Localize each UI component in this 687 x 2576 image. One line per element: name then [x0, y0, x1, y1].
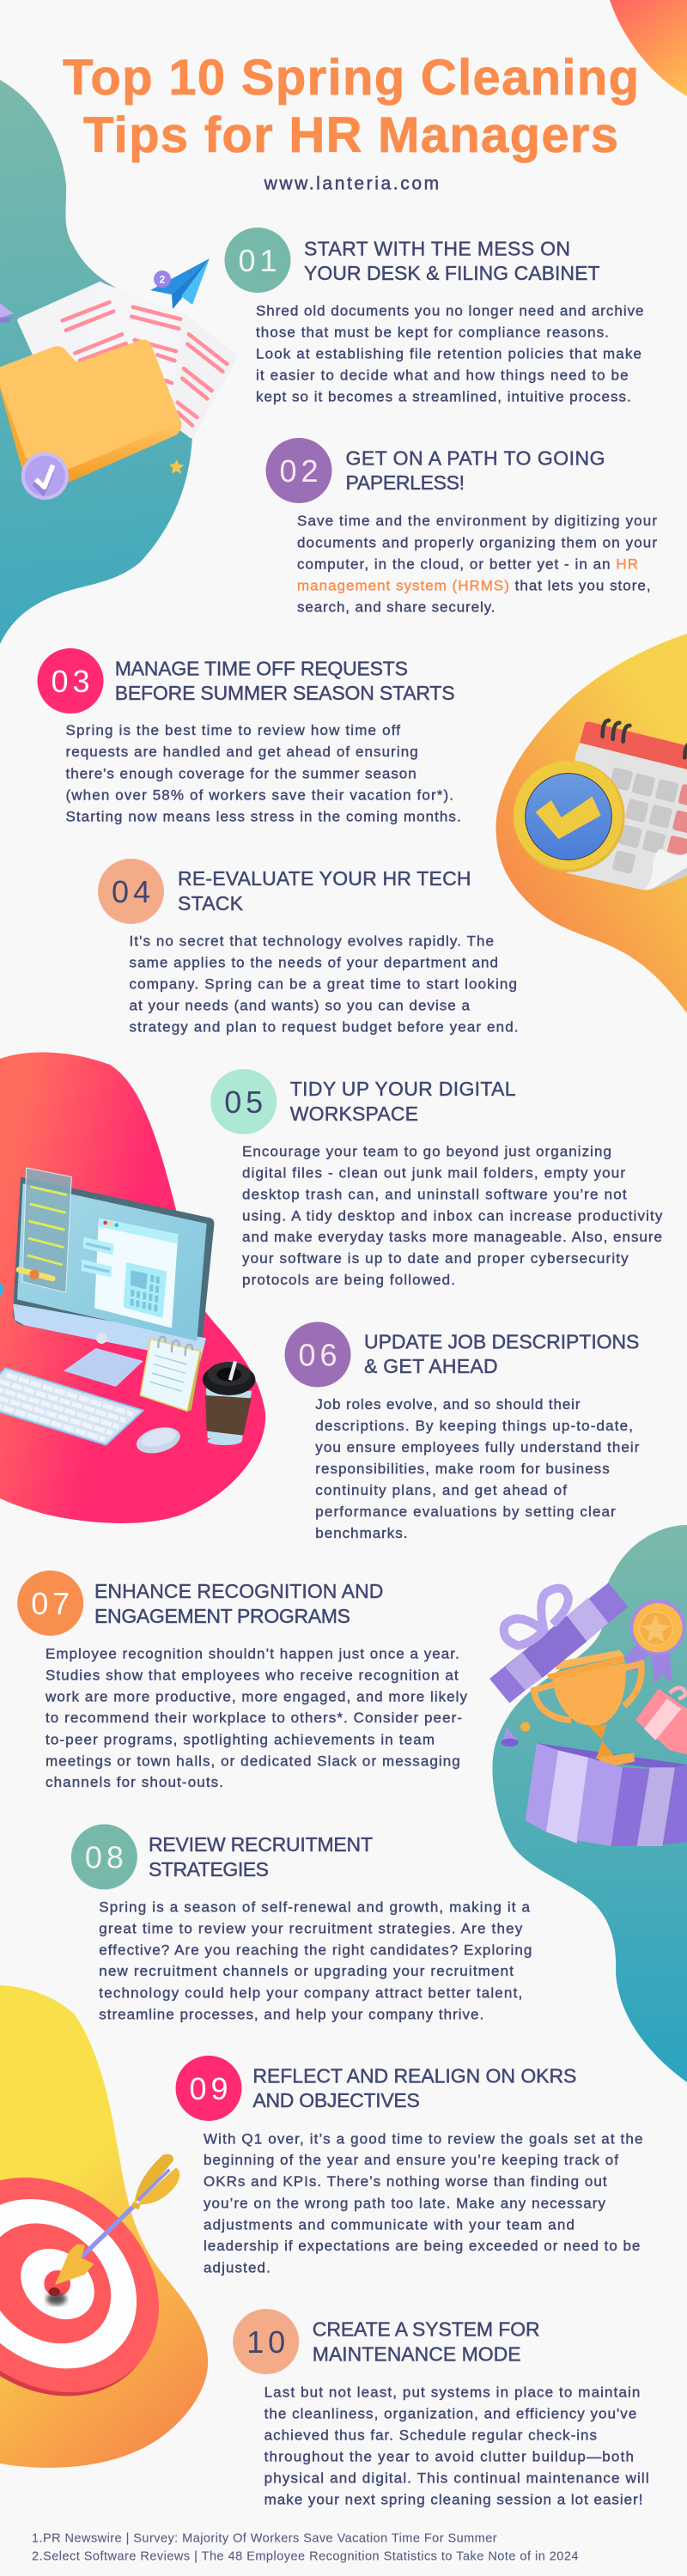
body 07: work are more productive, more engaged, and more likely: [45, 1688, 467, 1704]
body 06: descriptions. By keeping things up-to-date,: [315, 1418, 633, 1434]
section 01: [225, 228, 644, 404]
badge 02: 02: [280, 453, 318, 489]
body 06: responsibilities, make room for business: [315, 1461, 610, 1477]
heading 02: GET ON A PATH TO GOING: [345, 447, 605, 469]
heading 06: [364, 1330, 639, 1377]
section 08: [71, 1824, 532, 2022]
heading 08: [149, 1833, 373, 1880]
badge 02: [266, 438, 331, 503]
badge 03: 03: [52, 664, 89, 699]
footnotes: 1.PR Newswire | Survey: Majority Of Workers Save Vacation Time For Summer: [32, 2531, 497, 2545]
blob: pink left: [0, 1052, 265, 1523]
body 05: your software is up to date and proper cybersecurity: [242, 1250, 629, 1267]
body 06: continuity plans, and get ahead of: [315, 1482, 567, 1498]
blob: yellow left: [0, 1985, 208, 2468]
body 10: [264, 2384, 649, 2507]
badge 04: [98, 859, 164, 924]
body 06: performance evaluations by setting clear: [315, 1504, 616, 1520]
body 05: and make everyday tasks more manageable. Also, ensure: [242, 1229, 662, 1245]
illustration: paper plane: 2: [160, 273, 166, 285]
body 07: Studies show that employees who receive recognition at: [46, 1667, 459, 1683]
heading 05: [290, 1078, 516, 1125]
body 05: [242, 1144, 663, 1288]
body 04: company. Spring can be a great time to start looking: [129, 975, 517, 992]
body 01: [256, 302, 644, 404]
heading 03: MANAGE TIME OFF REQUESTS: [115, 657, 408, 679]
body 10: throughout the year to avoid clutter buildup—both: [264, 2448, 634, 2464]
body 09: With Q1 over, it’s a good time to review the goals set at the: [204, 2130, 642, 2147]
heading 09: REFLECT AND REALIGN ON OKRS: [252, 2064, 576, 2087]
body 05: desktop trash can, and uninstall software you're not: [242, 1186, 627, 1202]
heading 03: [115, 657, 455, 704]
body 04: at your needs (and wants) so you can devise a: [129, 997, 471, 1013]
body 03: Starting now means less stress in the coming months.: [65, 808, 461, 824]
body 07: to recommend their workplace to others*. Consider peer-: [46, 1710, 462, 1726]
body 09: adjustments and communicate with your team and: [204, 2216, 575, 2233]
badge 01: [225, 228, 290, 293]
body 08: great time to review your recruitment strategies. Are they: [99, 1920, 523, 1937]
heading 01: START WITH THE MESS ON: [304, 237, 570, 259]
badge 07: 07: [31, 1586, 70, 1621]
body 02: [297, 513, 657, 616]
badge 06: 06: [299, 1338, 337, 1372]
body 03: Spring is the best time to review how time off: [65, 722, 400, 738]
body 07: Employee recognition shouldn’t happen just once a year.: [46, 1645, 459, 1662]
body 03: (when over 58% of workers save their vacation for*).: [65, 787, 453, 803]
heading 08: STRATEGIES: [149, 1858, 269, 1880]
badge 01: 01: [239, 243, 277, 278]
body 06: you ensure employees fully understand their: [315, 1439, 640, 1455]
body 03: [65, 722, 461, 824]
illustration: paper plane: [150, 258, 210, 309]
body 06: [315, 1396, 640, 1541]
heading 01: YOUR DESK & FILING CABINET: [304, 262, 599, 284]
badge 09: [175, 2056, 242, 2121]
body 02: computer, in the cloud, or better yet - in an HR: [297, 556, 638, 572]
heading 10: [313, 2318, 540, 2365]
body 05: protocols are being followed.: [242, 1272, 455, 1288]
body 10: make your next spring cleaning session a lot easier!: [264, 2491, 642, 2507]
illustration: desktop computer, keyboard, coffee: [0, 1168, 255, 1458]
section 05: [210, 1069, 663, 1288]
heading 02: PAPERLESS!: [345, 471, 465, 494]
body 01: those that must be kept for compliance reasons.: [256, 324, 609, 340]
badge 08: [71, 1824, 137, 1889]
title: Top 10 Spring Cleaning: [63, 50, 639, 106]
body 04: same applies to the needs of your department and: [129, 954, 498, 970]
blob: teal right: [492, 1525, 687, 2082]
blob: orange right: [495, 634, 687, 1013]
body 01: kept so it becomes a streamlined, intuitive process.: [256, 388, 631, 404]
body 08: [99, 1899, 532, 2022]
badge 05: 05: [224, 1084, 263, 1120]
heading 03: BEFORE SUMMER SEASON STARTS: [115, 682, 455, 704]
badge 09: 09: [189, 2071, 228, 2106]
illustration: folder with papers: [0, 285, 235, 500]
title: [63, 50, 639, 163]
body 10: achieved thus far. Schedule regular check-ins: [264, 2427, 597, 2443]
body 08: Spring is a season of self-renewal and growth, making it a: [99, 1899, 531, 1915]
section 04: [98, 859, 519, 1036]
heading 04: [178, 867, 471, 914]
body 07: meetings or town halls, or dedicated Slack or messaging: [46, 1753, 460, 1769]
heading 10: CREATE A SYSTEM FOR: [313, 2318, 540, 2341]
body 05: using. A tidy desktop and inbox can increase productivity: [242, 1207, 663, 1224]
body 08: streamline processes, and help your company thrive.: [99, 2006, 483, 2022]
badge 04: 04: [112, 874, 150, 909]
body 10: physical and digital. This continual maintenance will: [264, 2470, 649, 2486]
body 03: requests are handled and get ahead of ensuring: [65, 744, 418, 760]
body 03: there's enough coverage for the summer season: [65, 765, 416, 781]
body 07: channels for shout-outs.: [46, 1774, 223, 1790]
heading 04: STACK: [178, 892, 244, 914]
body 07: to-peer programs, spotlighting achievements in team: [46, 1731, 435, 1747]
section 07: [17, 1571, 467, 1790]
heading 07: ENGAGEMENT PROGRAMS: [94, 1605, 350, 1627]
section 02: [266, 438, 657, 616]
body 08: new recruitment channels or upgrading your recruitment: [99, 1963, 514, 1979]
badge 05: [210, 1069, 277, 1134]
heading 01: [304, 237, 599, 284]
body 06: Job roles evolve, and so should their: [315, 1396, 581, 1413]
body 09: beginning of the year and ensure you’re keeping track of: [204, 2152, 618, 2168]
body 01: it easier to decide what and how things need to be: [256, 367, 629, 383]
body 02: search, and share securely.: [297, 599, 495, 616]
body 10: Last but not least, put systems in place to maintain: [264, 2384, 640, 2400]
body 08: effective? Are you reaching the right candidates? Exploring: [99, 1941, 532, 1958]
section 03: [38, 648, 461, 824]
heading 07: ENHANCE RECOGNITION AND: [94, 1580, 383, 1602]
heading 06: & GET AHEAD: [364, 1355, 498, 1377]
section 10: [233, 2309, 649, 2507]
body 01: Look at establishing file retention policies that make: [256, 345, 641, 361]
body 07: [45, 1645, 467, 1790]
heading 06: UPDATE JOB DESCRIPTIONS: [364, 1330, 639, 1352]
body 02: Save time and the environment by digitizing your: [297, 513, 657, 529]
footnotes: 2.Select Software Reviews | The 48 Employee Recognition Statistics to Take Note of in 2024: [32, 2549, 578, 2563]
body 06: benchmarks.: [315, 1525, 407, 1541]
body 04: strategy and plan to request budget before year end.: [129, 1018, 519, 1036]
body 05: digital files - clean out junk mail folders, empty your: [242, 1164, 625, 1182]
footnotes: [32, 2531, 578, 2563]
body 09: adjusted.: [204, 2259, 271, 2275]
body 04: [129, 933, 519, 1036]
body 10: the cleanliness, organization, and efficiency you've: [264, 2405, 636, 2421]
website url: www.lanteria.com: [264, 173, 439, 194]
badge 08: 08: [85, 1839, 124, 1875]
body 09: [204, 2130, 642, 2275]
body 09: leadership if expectations are being exceeded or need to be: [204, 2238, 640, 2254]
body 02: management system (HRMS) that lets you store,: [297, 577, 651, 594]
badge 10: [233, 2309, 299, 2374]
body 08: technology could help your company attract better talent,: [99, 1984, 522, 2001]
title: Tips for HR Managers: [83, 107, 618, 163]
body 09: OKRs and KPIs. There’s nothing worse than finding out: [204, 2173, 607, 2190]
illustration: calendar with check badge: [514, 720, 687, 890]
body 01: Shred old documents you no longer need and archive: [256, 302, 644, 319]
blob: coral top right: [610, 0, 687, 96]
body 09: you’re on the wrong path too late. Make any necessary: [204, 2195, 606, 2211]
heading 05: TIDY UP YOUR DIGITAL: [290, 1078, 516, 1100]
section 06: [285, 1322, 640, 1541]
badge 07: [17, 1571, 83, 1636]
badge 10: 10: [246, 2324, 285, 2360]
badge 06: [285, 1322, 350, 1388]
heading 05: WORKSPACE: [290, 1103, 418, 1125]
heading 08: REVIEW RECRUITMENT: [149, 1833, 373, 1856]
illustration: target with arrow: [0, 2133, 202, 2440]
badge 03: [38, 648, 103, 714]
body 04: It's no secret that technology evolves rapidly. The: [129, 933, 494, 950]
blob: teal top left: [0, 80, 192, 644]
heading 04: RE-EVALUATE YOUR HR TECH: [178, 867, 471, 890]
heading 07: [94, 1580, 383, 1627]
heading 09: [252, 2064, 576, 2111]
heading 09: AND OBJECTIVES: [252, 2089, 420, 2111]
section 09: [175, 2056, 642, 2275]
illustration: gift box with trophy and medal: [489, 1583, 687, 1846]
heading 02: [345, 447, 605, 494]
body 05: Encourage your team to go beyond just organizing: [242, 1144, 611, 1159]
body 02: documents and properly organizing them on your: [297, 534, 657, 550]
heading 10: MAINTENANCE MODE: [313, 2342, 521, 2365]
